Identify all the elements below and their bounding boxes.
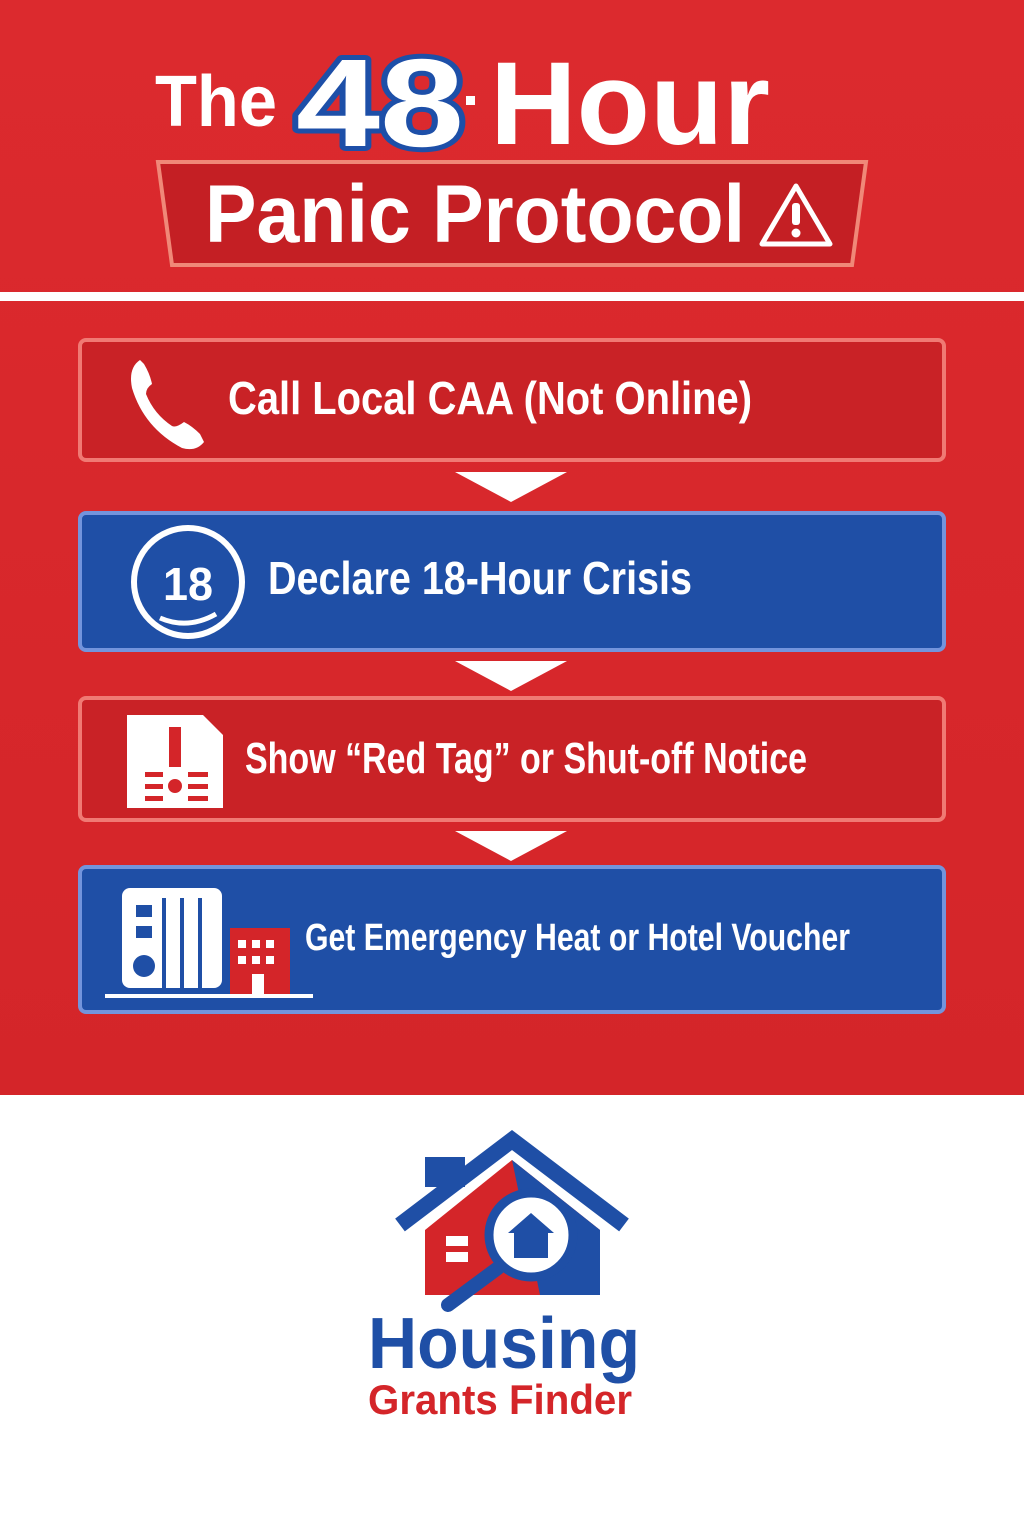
step 3: red tag notice: Show “Red Tag” or Shut-off Notice (245, 734, 807, 783)
icon: heater and hotel (105, 888, 313, 998)
step 4: emergency heat or hotel (80, 867, 944, 1012)
arrow 1 (455, 472, 567, 502)
step 2: declare crisis: Declare 18-Hour Crisis (268, 552, 692, 604)
arrow 3 (455, 831, 567, 861)
icon: house with magnifier (400, 1140, 624, 1305)
icon: warning triangle (762, 186, 830, 244)
title line 1: 48 (296, 34, 464, 173)
step 3: red tag notice (80, 698, 944, 820)
title banner: Panic Protocol: Panic Protocol (205, 169, 745, 260)
title line 1: Hour (490, 38, 770, 170)
logo: Housing (368, 1304, 640, 1384)
step 2: declare crisis (80, 513, 944, 650)
icon: 18 clock: 18 (163, 558, 213, 610)
logo: Grants Finder (368, 1376, 632, 1423)
step 1: call CAA (80, 340, 944, 460)
title line 1 (155, 34, 770, 173)
step 4: emergency heat or hotel: Get Emergency Heat or Hotel Voucher (305, 917, 850, 959)
step 1: call CAA: Call Local CAA (Not Online) (228, 372, 752, 424)
arrow 2 (455, 661, 567, 691)
title line 1: The (155, 62, 277, 142)
logo (368, 1140, 640, 1423)
divider white line (0, 292, 1024, 301)
icon: notice document (127, 715, 223, 808)
icon: phone (131, 360, 204, 449)
red background (0, 0, 1024, 1095)
icon: 18 clock (134, 528, 242, 636)
